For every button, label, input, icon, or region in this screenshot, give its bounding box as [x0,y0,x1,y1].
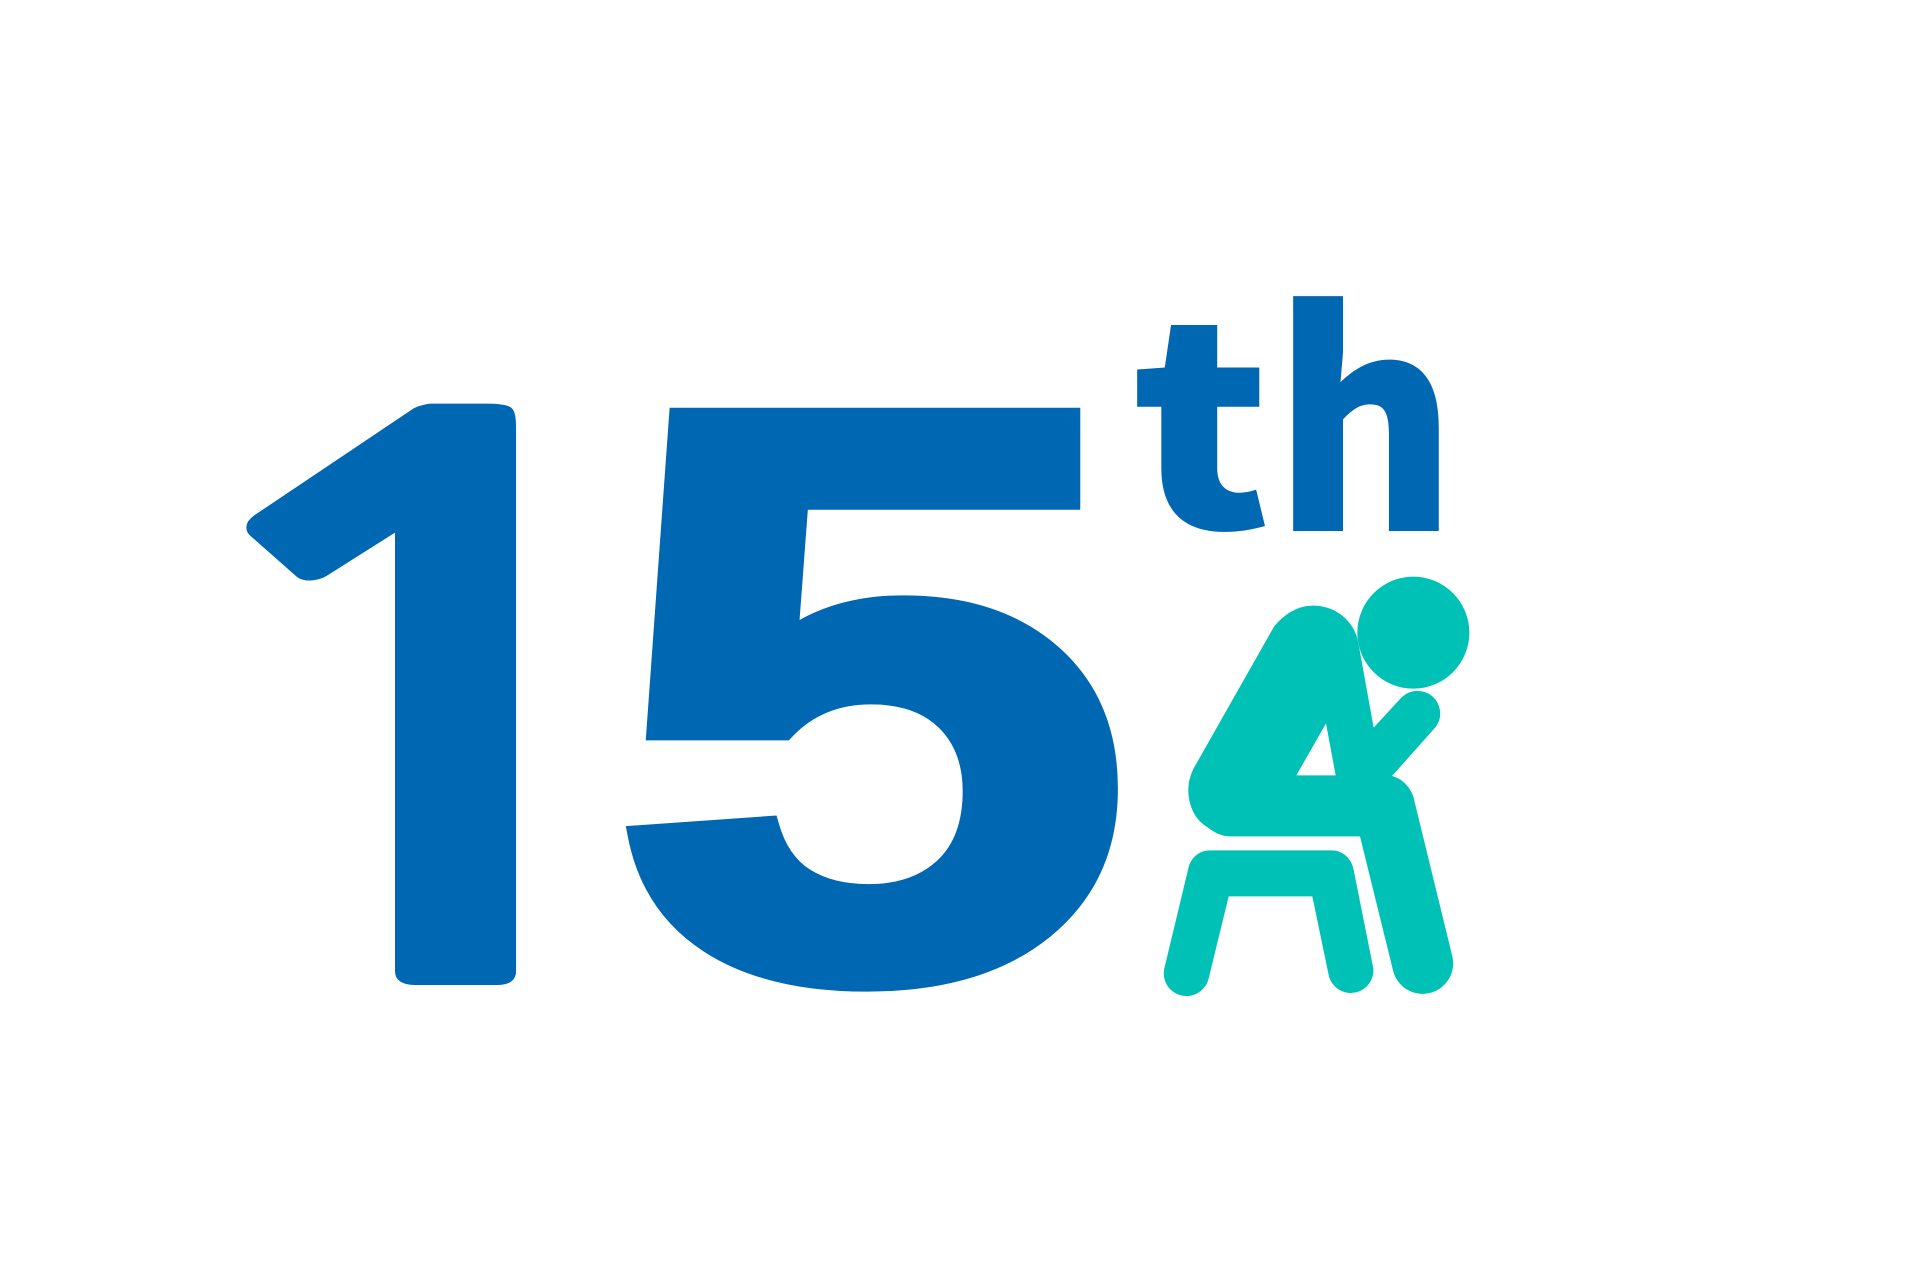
superscript t: t [1132,201,1271,609]
digit 1: 1 [119,344,746,1092]
superscript h: h [1273,190,1457,616]
chair [1164,850,1373,996]
title: 15th ordinal [119,190,1457,1146]
head [1357,577,1469,689]
icon: person sitting with head in hand [1164,577,1469,996]
digit 5: 5 [610,242,1133,1146]
body, arm and leg [1188,606,1453,994]
